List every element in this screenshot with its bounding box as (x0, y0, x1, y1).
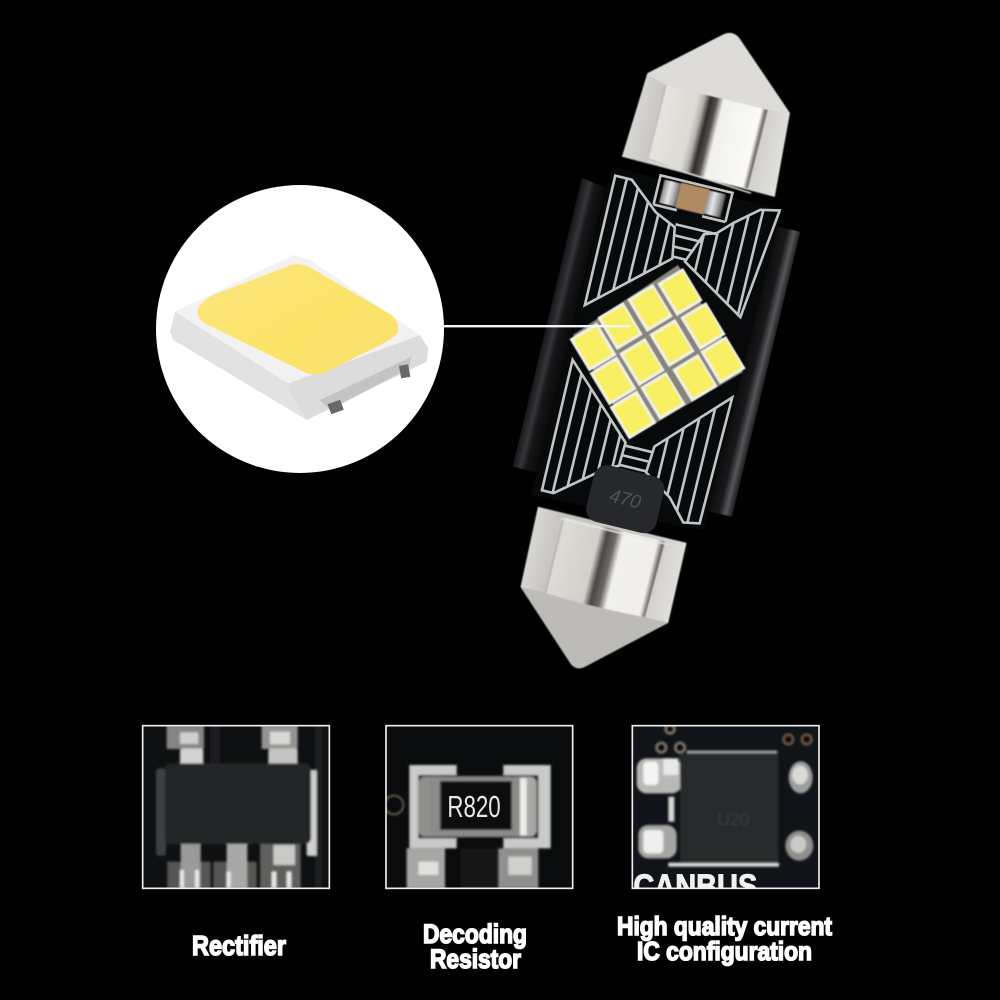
inductor: 470 (583, 462, 667, 536)
label: Decoding Resistor: Resistor (430, 944, 521, 974)
pad: top right (262, 726, 298, 765)
label: Rectifier: Rectifier (192, 930, 286, 961)
chip body (165, 763, 311, 844)
pad: top left (167, 726, 204, 767)
label: High quality current IC configuration (617, 911, 832, 966)
solder: left pads (637, 758, 682, 858)
fin: left heat sink (512, 178, 607, 473)
inductor: 470: 470 (607, 486, 643, 514)
top end cap (621, 15, 810, 199)
LED: column 4 (657, 268, 746, 384)
label: Decoding Resistor: Decoding (423, 919, 527, 949)
resistor body (418, 777, 537, 837)
chip body (680, 754, 778, 861)
board print: CANBUS: CANBUS (633, 869, 757, 906)
chip outline strips (668, 751, 779, 867)
panel: decoding resistor photo (385, 726, 573, 888)
label: High quality current IC configuration: IC configuration (637, 936, 812, 966)
vias (656, 724, 812, 753)
trace: lower left wedge (540, 356, 627, 494)
chip marking: U20 (717, 809, 749, 829)
pads: bottom (167, 843, 301, 888)
magnified LED chip circle (156, 185, 444, 473)
trace: upper right wedge (683, 208, 782, 320)
bulb (512, 32, 800, 670)
pad frame: right (503, 765, 551, 848)
label: R820: R820 (447, 790, 501, 824)
fin: right heat sink (705, 226, 801, 517)
LED: column 3 (627, 284, 718, 402)
circuit board (529, 164, 783, 547)
bottom end cap (503, 507, 688, 687)
trace: upper left wedge (583, 174, 676, 308)
label: Decoding Resistor (423, 919, 527, 974)
pad frame: left (409, 765, 457, 848)
solder: right pads (785, 761, 813, 861)
trace: centre bars (592, 175, 733, 476)
LED array (569, 265, 746, 440)
label: High quality current IC configuration: High quality current (617, 911, 832, 941)
LED: column 1 (569, 322, 657, 440)
panel: rectifier photo (143, 726, 329, 888)
LED: column 2 (597, 302, 686, 420)
solder: lower pads (407, 848, 538, 888)
callout line (440, 325, 631, 327)
resistor: top component (659, 178, 726, 219)
icon: SMD LED chip (170, 255, 428, 420)
via ring (385, 796, 403, 814)
panel: current IC photo (632, 724, 819, 906)
trace: lower right wedge (644, 394, 734, 525)
